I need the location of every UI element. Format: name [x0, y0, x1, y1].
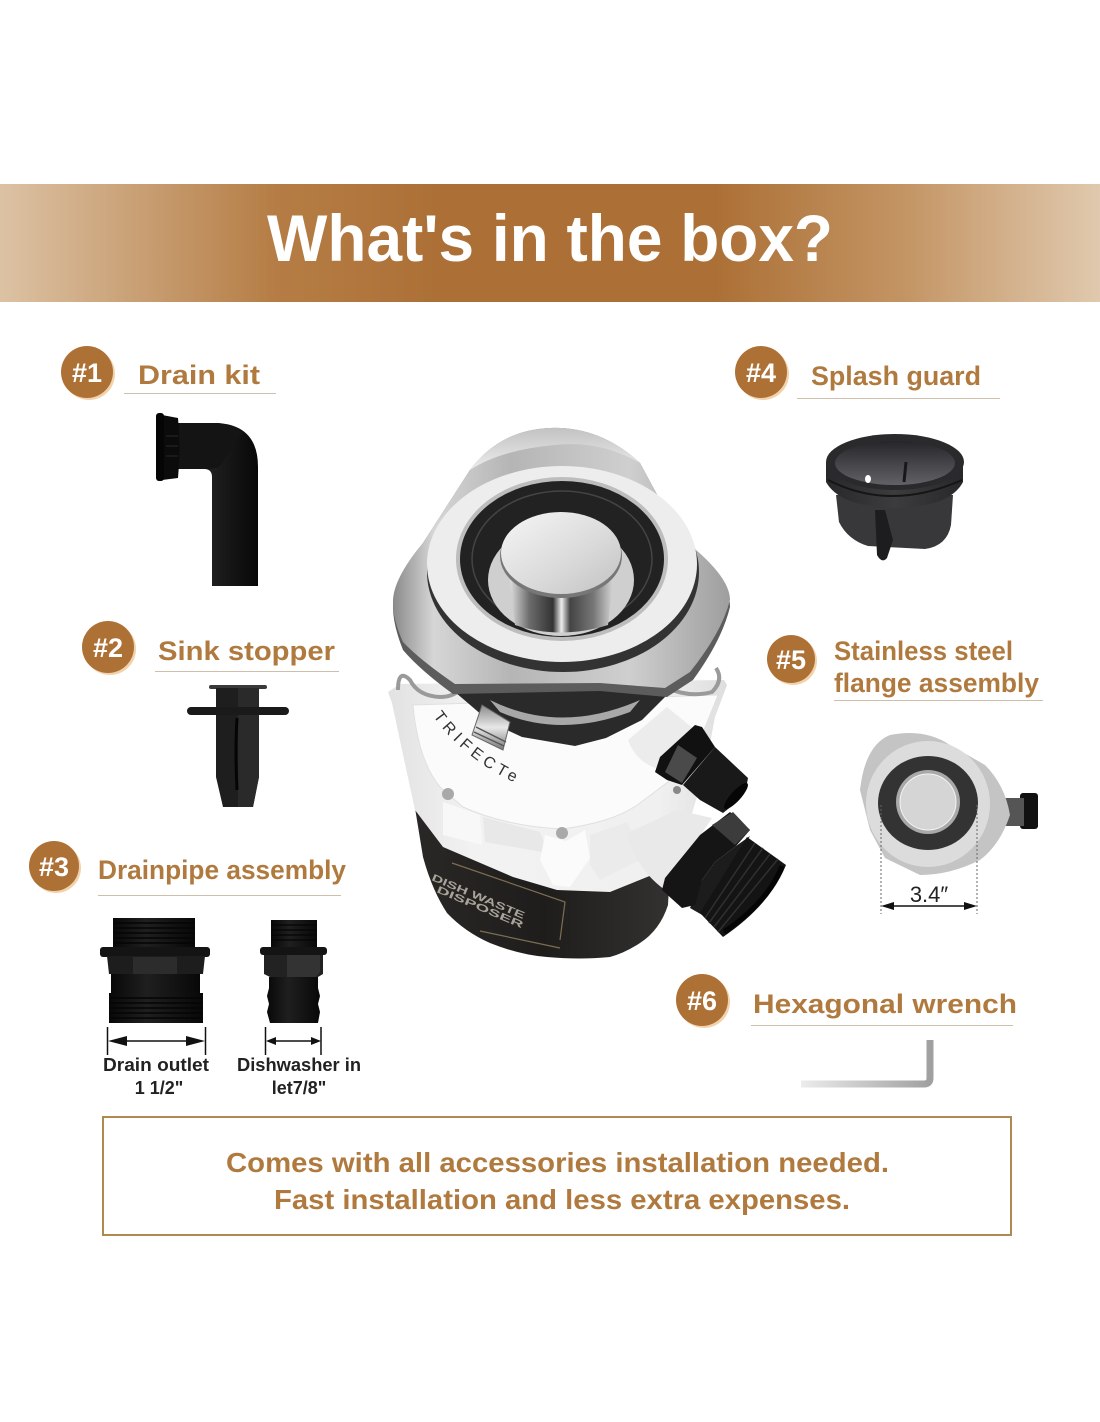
item 6 header: hexagonal wrench: #6 — [687, 986, 717, 1016]
item 1 header: drain kit: Drain kit — [138, 360, 260, 390]
dimension: drain outlet — [108, 1027, 206, 1055]
upper port — [628, 707, 751, 813]
lower port — [627, 810, 786, 937]
bolts — [442, 733, 681, 839]
flange ring — [427, 466, 699, 672]
item 1 header: drain kit: #1 — [72, 358, 102, 388]
item 6 header: hexagonal wrench: Hexagonal wrench — [753, 989, 1017, 1019]
upper dome — [413, 695, 718, 829]
housing ribs — [443, 802, 640, 887]
black base — [415, 800, 672, 958]
item 1 header: drain kit — [61, 346, 276, 400]
item 4 header: splash guard: #4 — [746, 358, 776, 388]
item 6 header: hexagonal wrench — [676, 974, 1017, 1028]
callout box: Fast installation and less extra expenses. — [274, 1184, 850, 1215]
item 3 header: drainpipe assembly — [29, 841, 346, 896]
label: dishwasher inlet: Dishwasher in — [237, 1055, 361, 1075]
dishwasher inlet fitting — [260, 920, 327, 1023]
dimension: dishwasher inlet — [266, 1027, 321, 1055]
white housing — [388, 680, 727, 892]
label: drain outlet: 1 1/2" — [135, 1078, 183, 1098]
item 5 header: flange assembly: #5 — [776, 645, 806, 675]
banner — [0, 184, 1100, 302]
callout box — [103, 1117, 1011, 1235]
label: dishwasher inlet — [237, 1055, 361, 1098]
label: drain outlet — [103, 1055, 209, 1098]
callout box: Comes with all accessories installation needed. — [226, 1147, 889, 1178]
flange plate — [393, 428, 730, 697]
latch clip — [472, 705, 510, 750]
stopper — [488, 512, 634, 636]
item 3 header: drainpipe assembly: Drainpipe assembly — [98, 855, 346, 885]
drain kit elbow — [156, 413, 258, 586]
item 5 header: flange assembly — [767, 635, 1043, 700]
item 2 header: sink stopper — [82, 621, 339, 675]
clamp wire — [398, 668, 719, 697]
title: What's in the box? — [267, 201, 833, 275]
splash guard — [826, 434, 964, 560]
flange top view — [860, 733, 1038, 875]
item 3 header: drainpipe assembly: #3 — [39, 852, 69, 882]
dimension: 3.4 inch — [881, 805, 977, 914]
main product: disposer — [388, 428, 786, 958]
label: drain outlet: Drain outlet — [103, 1055, 209, 1075]
item 4 header: splash guard: Splash guard — [811, 361, 981, 391]
base label: DISPOSER — [435, 885, 526, 932]
sink stopper — [187, 685, 289, 807]
item 2 header: sink stopper: Sink stopper — [158, 636, 336, 666]
item 4 header: splash guard — [735, 346, 1000, 400]
item 5 header: flange assembly: flange assembly — [834, 668, 1039, 698]
item 2 header: sink stopper: #2 — [93, 633, 123, 663]
hexagonal wrench — [801, 1040, 930, 1084]
drain outlet fitting — [100, 918, 210, 1023]
base label: DISH WASTE — [430, 873, 527, 922]
item 5 header: flange assembly: Stainless steel — [834, 636, 1013, 666]
dimension: 3.4 inch: 3.4″ — [910, 882, 948, 907]
chrome collar — [455, 690, 672, 746]
base label — [430, 863, 565, 948]
label: dishwasher inlet: let7/8" — [272, 1078, 326, 1098]
brand: TRIFECTe — [436, 710, 516, 782]
